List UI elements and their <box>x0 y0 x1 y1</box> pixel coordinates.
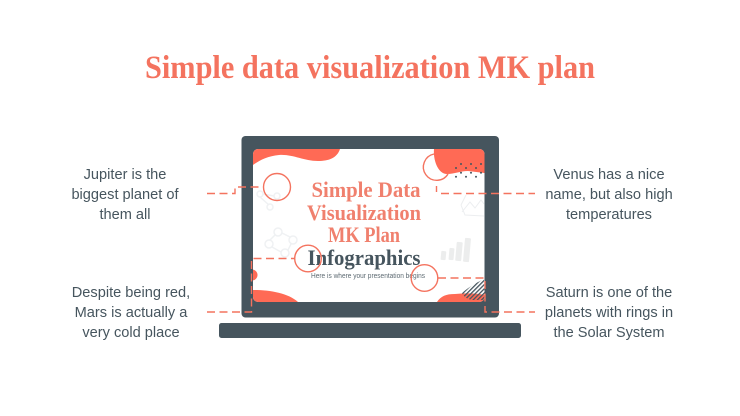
faint bar icons <box>441 238 471 262</box>
title: Simple data visualization MK plan <box>145 50 595 86</box>
text: Mars: Mars is actually a <box>75 305 188 321</box>
screen title <box>307 177 421 270</box>
faint line chart icon <box>461 195 484 216</box>
text: Saturn: Saturn is one of the <box>546 285 672 301</box>
text: Jupiter: Jupiter is the <box>84 167 166 183</box>
screen title: Visualization <box>307 200 421 225</box>
text: Mars: Despite being red, <box>72 285 190 301</box>
faint network icon bottom <box>265 228 297 257</box>
text: Venus: temperatures <box>566 207 652 223</box>
screen title: Simple Data <box>312 177 420 202</box>
text: Mars: very cold place <box>82 325 180 341</box>
screen subtitle: Here is where your presentation begins <box>311 271 425 280</box>
text: Venus: name, but also high <box>545 187 673 203</box>
screen blob: top right <box>434 149 485 174</box>
faint network icon top <box>257 191 280 210</box>
screen title: Infographics <box>308 245 421 270</box>
screen title: MK Plan <box>328 222 400 247</box>
marker: Mars <box>207 245 321 312</box>
screen blob: left edge <box>253 270 258 280</box>
text: Jupiter: biggest planet of <box>71 187 179 203</box>
marker: Saturn <box>411 265 535 312</box>
text: Jupiter: them all <box>99 207 151 223</box>
laptop frame <box>242 136 499 318</box>
text: Saturn: the Solar System <box>553 325 665 341</box>
text: Saturn: planets with rings in <box>545 305 673 321</box>
laptop screen <box>246 149 485 302</box>
laptop base <box>219 323 521 338</box>
laptop <box>219 136 521 338</box>
marker: Venus <box>423 154 535 194</box>
screen blob: bottom right <box>437 293 485 302</box>
screen hatch <box>462 279 485 300</box>
screen blob: top left <box>253 149 340 165</box>
marker: Jupiter <box>207 174 290 200</box>
text: Venus: Venus has a nice <box>553 167 665 183</box>
screen dots <box>455 163 482 178</box>
screen blob: bottom left <box>253 290 298 302</box>
